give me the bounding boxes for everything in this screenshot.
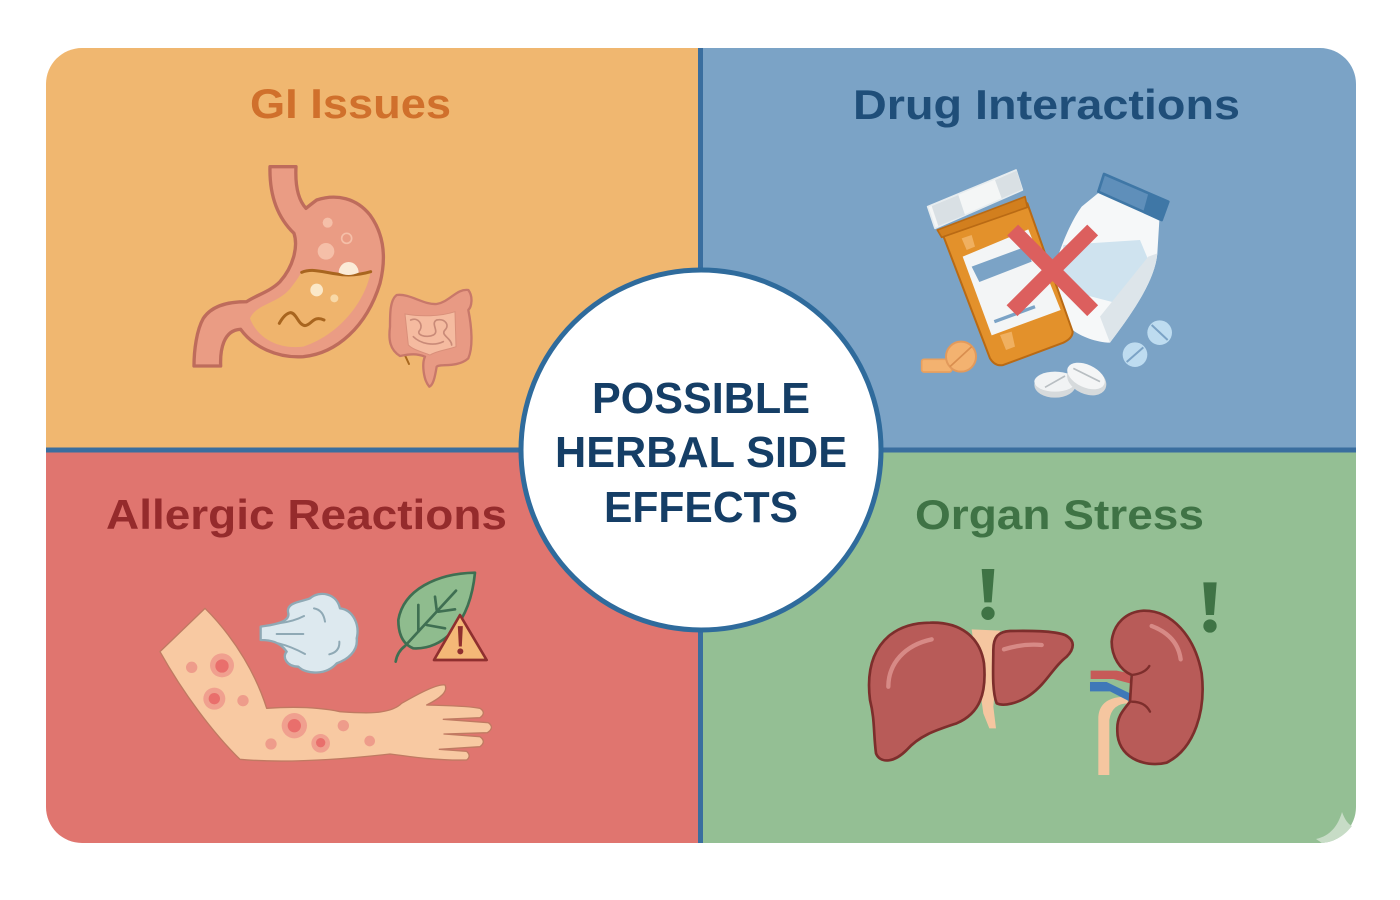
- panel: GI issues: [46, 48, 700, 450]
- icon: intestines: [389, 290, 471, 387]
- corner fold: [1316, 812, 1352, 843]
- heading: Organ Stress: Organ Stress: [915, 491, 1204, 538]
- panel: Allergic Reactions: [46, 450, 700, 843]
- panel: Drug Interactions: [700, 48, 1356, 450]
- orange pills: [922, 342, 976, 372]
- exclamation mark: kidney: [1203, 582, 1217, 633]
- heading: Drug Interactions: Drug Interactions: [853, 81, 1240, 128]
- center title: HERBAL SIDE: [555, 428, 847, 477]
- blue pills: [1123, 320, 1172, 367]
- icon: kidney: [1090, 611, 1203, 775]
- icon: liver: [869, 623, 1073, 760]
- center title: [555, 374, 847, 532]
- exclamation mark: liver: [981, 569, 995, 620]
- heading: GI Issues: GI Issues: [250, 80, 451, 127]
- icon: arm with rash: [160, 608, 491, 761]
- center title: EFFECTS: [604, 483, 798, 532]
- heading: Allergic Reactions: Allergic Reactions: [106, 491, 507, 538]
- white bottle: [1050, 174, 1168, 343]
- center title: POSSIBLE: [592, 374, 810, 423]
- icon: leaf with warning: [396, 573, 487, 662]
- orange bottle: [928, 170, 1073, 365]
- icon: stomach: [194, 167, 383, 366]
- red X: [1012, 230, 1093, 311]
- panel: Organ Stress: [700, 450, 1356, 843]
- center circle badge: [521, 270, 881, 630]
- icon: sneeze cloud: [261, 594, 358, 673]
- icon: crossed-out medicine bottles: [922, 170, 1172, 401]
- white pills: [1034, 357, 1111, 401]
